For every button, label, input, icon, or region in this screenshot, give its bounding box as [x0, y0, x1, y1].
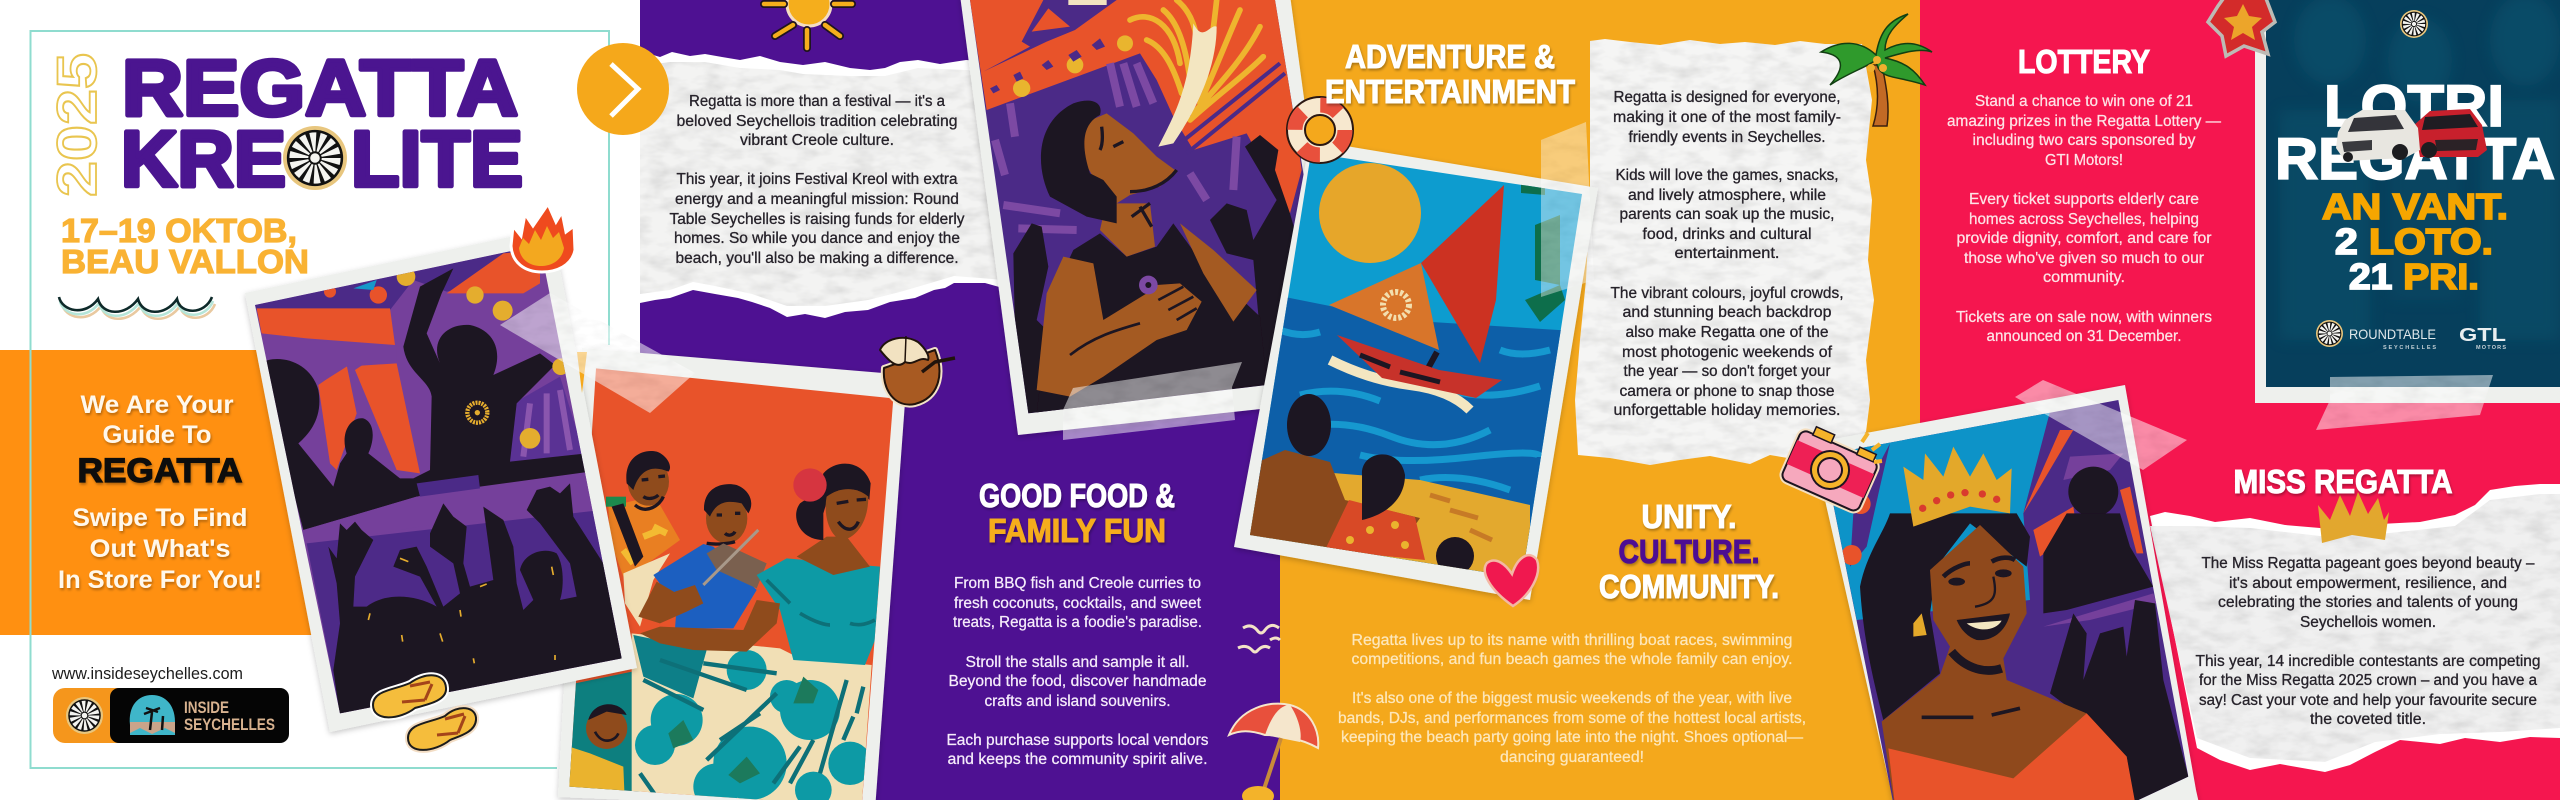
- poster car images: [2336, 109, 2487, 162]
- panel: white intro background: [0, 0, 640, 800]
- text block: family friendly: parents can soak up the music,: [1620, 206, 1834, 223]
- icon: fire sticker: [511, 204, 575, 272]
- guide call to action: Swipe To Find: [72, 504, 247, 532]
- text block: about regatta: beloved Seychellois tradition celebrating: [676, 113, 958, 130]
- torn paper: adventure text: [1575, 39, 1874, 465]
- icon: waves: [59, 297, 215, 319]
- guide call to action: [58, 391, 262, 594]
- text block: boat races and music: keeping the beach party going late into the night. Shoes optional—: [1341, 729, 1803, 746]
- text block: good food: Stroll the stalls and sample it all.: [966, 654, 1190, 671]
- guide call to action: We Are Your: [80, 391, 234, 419]
- text block: family friendly: The vibrant colours, joyful crowds,: [1610, 285, 1844, 302]
- photo: sailboat and family: [1234, 140, 1598, 600]
- icon: heart sticker: [1485, 555, 1538, 606]
- tape: concert photo corner: [500, 293, 695, 413]
- text block: good food: From BBQ fish and Creole curries to: [954, 575, 1201, 592]
- panel: orange guide band: [0, 350, 312, 635]
- website url: www.insideseychelles.com: [51, 664, 243, 683]
- heading: good food and family fun: GOOD FOOD &: [979, 477, 1175, 514]
- icon: flip flops: [373, 675, 476, 750]
- text block: family friendly: and stunning beach backdrop: [1622, 304, 1832, 321]
- logo badge: Inside Seychelles: INSIDE: [184, 698, 229, 717]
- poster title: [2275, 74, 2555, 192]
- text block: lottery: those who've given so much to our: [1964, 250, 2204, 267]
- event date and venue: 17–19 OKTOB,: [61, 212, 297, 249]
- poster title: REGATTA: [2275, 127, 2555, 192]
- panel: purple background: [640, 0, 1280, 800]
- poster sponsor logos: SEYCHELLES: [2383, 345, 2436, 351]
- poster sponsor logos: MOTORS: [2476, 345, 2506, 351]
- panel: crimson background: [1920, 0, 2560, 800]
- poster sponsor logos: GTL: [2459, 325, 2506, 345]
- text block: good food: treats, Regatta is a foodie's paradise.: [953, 614, 1202, 631]
- text block: lottery: provide dignity, comfort, and care for: [1956, 230, 2212, 247]
- text block: about regatta: energy and a meaningful mission: Round: [675, 191, 959, 208]
- heading: good food and family fun: FAMILY FUN: [988, 512, 1166, 549]
- text block: miss regatta: it's about empowerment, resilience, and: [2229, 575, 2507, 592]
- text block: lottery: announced on 31 December.: [1986, 328, 2182, 345]
- tape: queen photo: [2015, 380, 2187, 470]
- text block: about regatta: beach, you'll also be making a difference.: [676, 250, 958, 267]
- poster slogans: [2322, 186, 2508, 297]
- title: Regatta Kreolite: KRE: [121, 114, 286, 203]
- text block: good food: Each purchase supports local vendors: [946, 732, 1209, 749]
- text block: family friendly: camera or phone to snap those: [1620, 383, 1834, 400]
- title: Regatta Kreolite: REGATTA: [122, 43, 518, 132]
- heading: lottery: LOTTERY: [2018, 43, 2150, 80]
- title: Regatta Kreolite: O: [287, 114, 343, 203]
- text block: boat races and music: dancing guaranteed!: [1500, 749, 1644, 766]
- text block: lottery: Tickets are on sale now, with winners: [1956, 309, 2212, 326]
- photo: musicians and dancer: [558, 340, 927, 800]
- heading: adventure and entertainment: [1325, 38, 1575, 110]
- text block: miss regatta: This year, 14 incredible contestants are competing: [2196, 653, 2540, 670]
- year label: 2025: 2025: [45, 53, 108, 197]
- text block: family friendly: also make Regatta one of the: [1626, 324, 1828, 341]
- heading: miss regatta: MISS REGATTA: [2234, 463, 2452, 500]
- text block: boat races and music: It's also one of the biggest music weekends of the year, with live: [1352, 690, 1792, 707]
- text block: boat races and music: bands, DJs, and performances from some of the hottest local artists,: [1338, 710, 1806, 727]
- photo: fire breather: [959, 0, 1306, 438]
- photo: concert crowd: [240, 228, 650, 740]
- arrow button: [577, 43, 669, 135]
- poster slogans: 21 PRI.: [2349, 256, 2479, 297]
- text block: miss regatta: the coveted title.: [2310, 711, 2426, 728]
- text block: lottery: [1947, 93, 2221, 345]
- guide call to action: Out What's: [90, 535, 230, 563]
- torn paper: intro text: [640, 52, 1010, 318]
- text block: miss regatta: celebrating the stories and talents of young: [2218, 594, 2518, 611]
- text block: lottery: amazing prizes in the Regatta Lottery —: [1947, 113, 2221, 130]
- icon: star sticker: [2208, 0, 2275, 56]
- heading: good food and family fun: [979, 477, 1175, 549]
- tape: poster bottom: [2316, 375, 2493, 430]
- photo: crowned queen: [1810, 380, 2210, 800]
- text block: about regatta: This year, it joins Festival Kreol with extra: [676, 171, 958, 188]
- icon: life ring: [1287, 97, 1353, 163]
- guide call to action: Guide To: [102, 421, 212, 449]
- text block: good food: crafts and island souvenirs.: [984, 693, 1170, 710]
- text block: miss regatta: [2196, 555, 2540, 728]
- text block: miss regatta: Seychellois women.: [2300, 614, 2436, 631]
- text block: about regatta: Table Seychelles is raising funds for elderly: [670, 211, 965, 228]
- poster emblem: [2400, 10, 2428, 38]
- icon: crown: [2318, 492, 2389, 543]
- poster: Lotri Regatta: [2255, 0, 2560, 403]
- icon: round table wheel: [283, 126, 347, 190]
- text block: family friendly: [1610, 89, 1844, 419]
- text block: lottery: homes across Seychelles, helping: [1969, 211, 2199, 228]
- text block: family friendly: friendly events in Seychelles.: [1628, 129, 1826, 146]
- text block: family friendly: the year — so don't forget your: [1624, 363, 1830, 380]
- text block: family friendly: entertainment.: [1674, 245, 1780, 262]
- sliver of orange behind concert tape: [577, 352, 587, 393]
- icon: beach umbrella: [1229, 704, 1318, 800]
- icon: birds: [1238, 625, 1280, 652]
- heading: unity culture community: COMMUNITY.: [1599, 568, 1779, 605]
- heading: adventure and entertainment: ADVENTURE &: [1345, 38, 1555, 75]
- text block: about regatta: homes. So while you dance and enjoy the: [674, 230, 960, 247]
- poster slogans: AN VANT.: [2322, 186, 2508, 227]
- text block: good food: and keeps the community spirit alive.: [948, 751, 1208, 768]
- guide call to action: In Store For You!: [58, 566, 262, 594]
- panel: amber background: [1280, 0, 1920, 800]
- title: Regatta Kreolite: [121, 43, 523, 203]
- text block: family friendly: food, drinks and cultural: [1642, 226, 1812, 243]
- text block: boat races and music: [1338, 632, 1806, 766]
- poster sponsor logos: ROUNDTABLE: [2349, 326, 2436, 342]
- text block: lottery: Stand a chance to win one of 21: [1975, 93, 2193, 110]
- heading: unity culture community: [1599, 498, 1779, 605]
- text block: miss regatta: The Miss Regatta pageant goes beyond beauty –: [2202, 555, 2535, 572]
- text block: family friendly: most photogenic weekends of: [1622, 344, 1833, 361]
- text block: lottery: Every ticket supports elderly care: [1969, 191, 2199, 208]
- text block: miss regatta: for the Miss Regatta 2025 crown – and you have a: [2199, 672, 2537, 689]
- text block: family friendly: and lively atmosphere, while: [1628, 187, 1826, 204]
- logo badge: Inside Seychelles: SEYCHELLES: [184, 715, 275, 734]
- text block: good food: fresh coconuts, cocktails, and sweet: [954, 595, 1202, 612]
- text block: about regatta: [670, 93, 965, 267]
- guide call to action: REGATTA: [78, 452, 242, 490]
- text block: lottery: community.: [2043, 269, 2125, 286]
- heading: unity culture community: UNITY.: [1642, 498, 1736, 535]
- tape: sailboat photo: [1541, 122, 1594, 297]
- poster slogans: 2 LOTO.: [2335, 221, 2493, 262]
- tape: fire breather photo: [1063, 362, 1242, 440]
- logo badge: Inside Seychelles: [53, 688, 289, 743]
- text block: good food: [946, 575, 1209, 768]
- text block: family friendly: unforgettable holiday memories.: [1614, 402, 1840, 419]
- text block: about regatta: vibrant Creole culture.: [740, 132, 894, 149]
- text block: family friendly: Kids will love the games, snacks,: [1616, 167, 1838, 184]
- heading: adventure and entertainment: ENTERTAINMENT: [1325, 73, 1575, 110]
- torn paper: miss regatta text: [2150, 484, 2560, 772]
- poster title: LOTRI: [2324, 74, 2504, 139]
- event date and venue: [61, 212, 309, 280]
- icon: camera sticker: [1780, 422, 1882, 513]
- text block: about regatta: Regatta is more than a festival — it's a: [689, 93, 945, 110]
- icon: coconut drink: [880, 336, 955, 405]
- text block: lottery: including two cars sponsored by: [1972, 132, 2196, 149]
- heading: unity culture community: CULTURE.: [1618, 533, 1760, 570]
- text block: family friendly: making it one of the most family-: [1613, 109, 1841, 126]
- text block: boat races and music: Regatta lives up to its name with thrilling boat races, swimming: [1352, 632, 1792, 649]
- text block: family friendly: Regatta is designed for everyone,: [1614, 89, 1840, 106]
- icon: palm tree: [1821, 14, 1932, 126]
- icon: sun: [764, 0, 852, 48]
- event date and venue: BEAU VALLON: [61, 243, 309, 280]
- text block: lottery: GTI Motors!: [2045, 152, 2123, 169]
- text block: miss regatta: say! Cast your vote and help your favourite secure: [2199, 692, 2537, 709]
- text block: boat races and music: competitions, and fun beach games the whole family can enjoy.: [1352, 651, 1792, 668]
- text block: good food: Beyond the food, discover handmade: [948, 673, 1206, 690]
- panel border: teal outline: [30, 31, 609, 768]
- poster sponsor logos: [2316, 320, 2506, 351]
- title: Regatta Kreolite: LITE: [351, 114, 523, 203]
